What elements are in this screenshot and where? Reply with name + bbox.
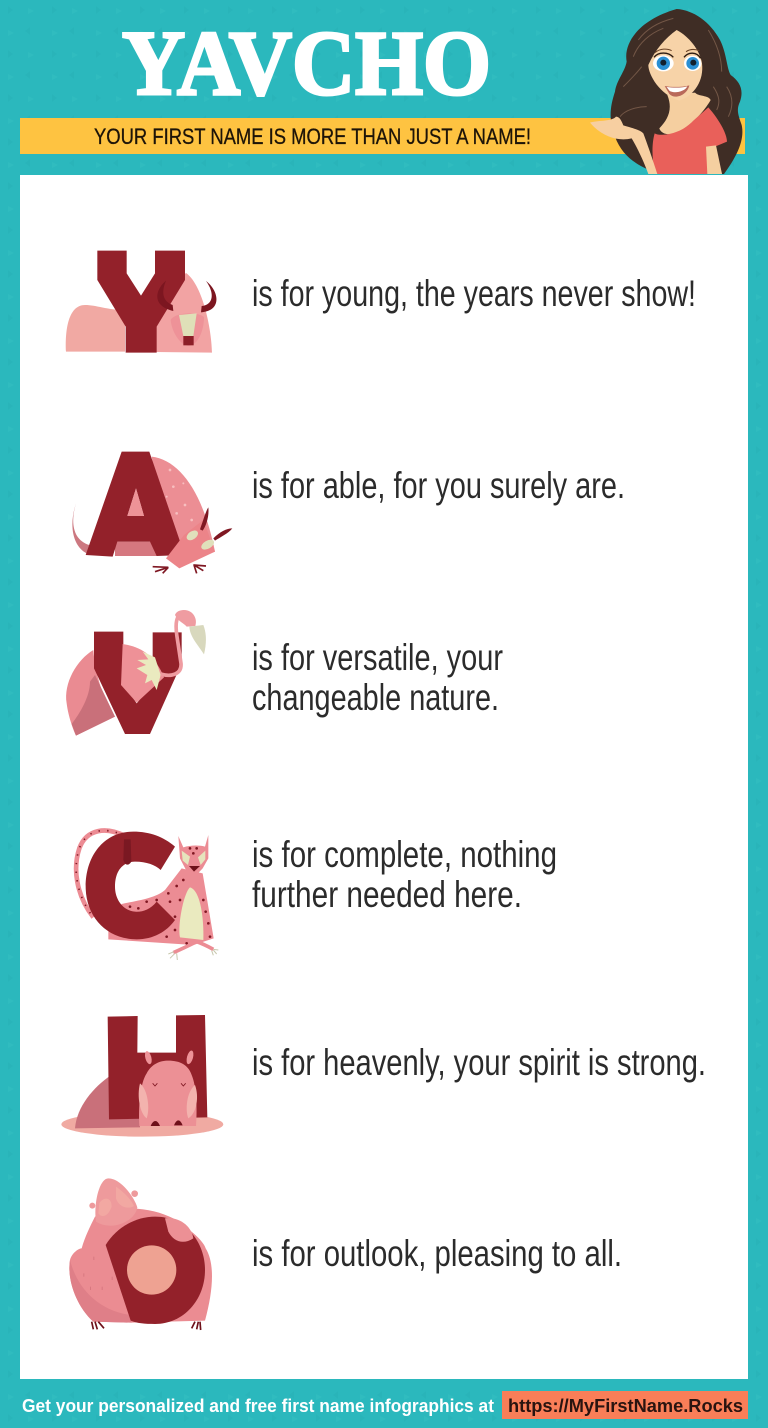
- hippo head: [139, 1061, 197, 1126]
- claws: [92, 1322, 201, 1330]
- letter Y with yak: [66, 251, 216, 353]
- letter V with flamingo: [66, 610, 206, 736]
- flamingo body: [121, 644, 164, 703]
- woman neck: [659, 93, 711, 134]
- text A: is for able, for you surely are.: [252, 465, 625, 506]
- text O: is for outlook, pleasing to all.: [252, 1233, 622, 1274]
- title: YAVCHO: [122, 12, 491, 114]
- text C: further needed here.: [252, 874, 522, 915]
- footer call to action: Get your personalized and free first name infographics at: [22, 1396, 494, 1416]
- footer url badge: [502, 1391, 748, 1419]
- letter C: [86, 832, 175, 939]
- flamingo head: [175, 610, 196, 627]
- footer url badge: https://MyFirstName.Rocks: [508, 1396, 743, 1416]
- letter H with hippo: [61, 1015, 223, 1137]
- leopard tail: [76, 831, 125, 917]
- letter O: [106, 1217, 205, 1324]
- flamingo neck: [161, 613, 183, 675]
- yak face: [171, 313, 204, 346]
- head: [95, 1178, 137, 1226]
- armadillo tail: [72, 503, 89, 553]
- text V: is for versatile, your: [252, 637, 503, 678]
- text C: is for complete, nothing: [252, 834, 557, 875]
- flamingo cream feathers: [137, 652, 161, 690]
- woman arm and hand: [590, 117, 657, 174]
- flamingo wing: [66, 650, 115, 736]
- flamingo beak: [189, 625, 206, 654]
- letter O with mole rat: [69, 1178, 212, 1330]
- letter H: [108, 1015, 207, 1119]
- letter Y: [97, 251, 185, 353]
- leopard legs and feet: [168, 942, 218, 960]
- hippo eyes: [153, 1083, 186, 1086]
- leopard head: [178, 835, 208, 877]
- white content panel: [20, 175, 748, 1379]
- yak body: [66, 305, 125, 352]
- belly through O: [127, 1245, 176, 1295]
- leopard spots: [129, 847, 211, 945]
- hippo ears: [144, 1050, 153, 1065]
- letter C with leopard: [76, 831, 218, 960]
- leopard body: [108, 868, 214, 945]
- woman eyes: [653, 49, 701, 71]
- armadillo head: [166, 520, 215, 568]
- hippo nostrils: [151, 1120, 183, 1126]
- body: [69, 1209, 212, 1323]
- hippo plate: [61, 1112, 223, 1137]
- illustration: cartoon woman: [590, 9, 742, 174]
- woman smile: [665, 85, 689, 97]
- text V: [252, 637, 503, 718]
- hippo back: [75, 1075, 140, 1128]
- subtitle text: YOUR FIRST NAME IS MORE THAN JUST A NAME!: [94, 124, 531, 149]
- text V: changeable nature.: [252, 677, 499, 718]
- subtitle banner: [20, 118, 745, 154]
- leopard belly: [179, 887, 203, 940]
- yak horns: [157, 281, 216, 312]
- text C: [252, 834, 557, 915]
- letter V: [94, 632, 182, 734]
- letter A with armadillo: [72, 452, 232, 573]
- woman shirt: [652, 107, 727, 174]
- armadillo feet: [153, 565, 206, 573]
- letter A: [86, 452, 185, 557]
- woman face: [648, 30, 702, 101]
- armadillo shell: [152, 457, 215, 563]
